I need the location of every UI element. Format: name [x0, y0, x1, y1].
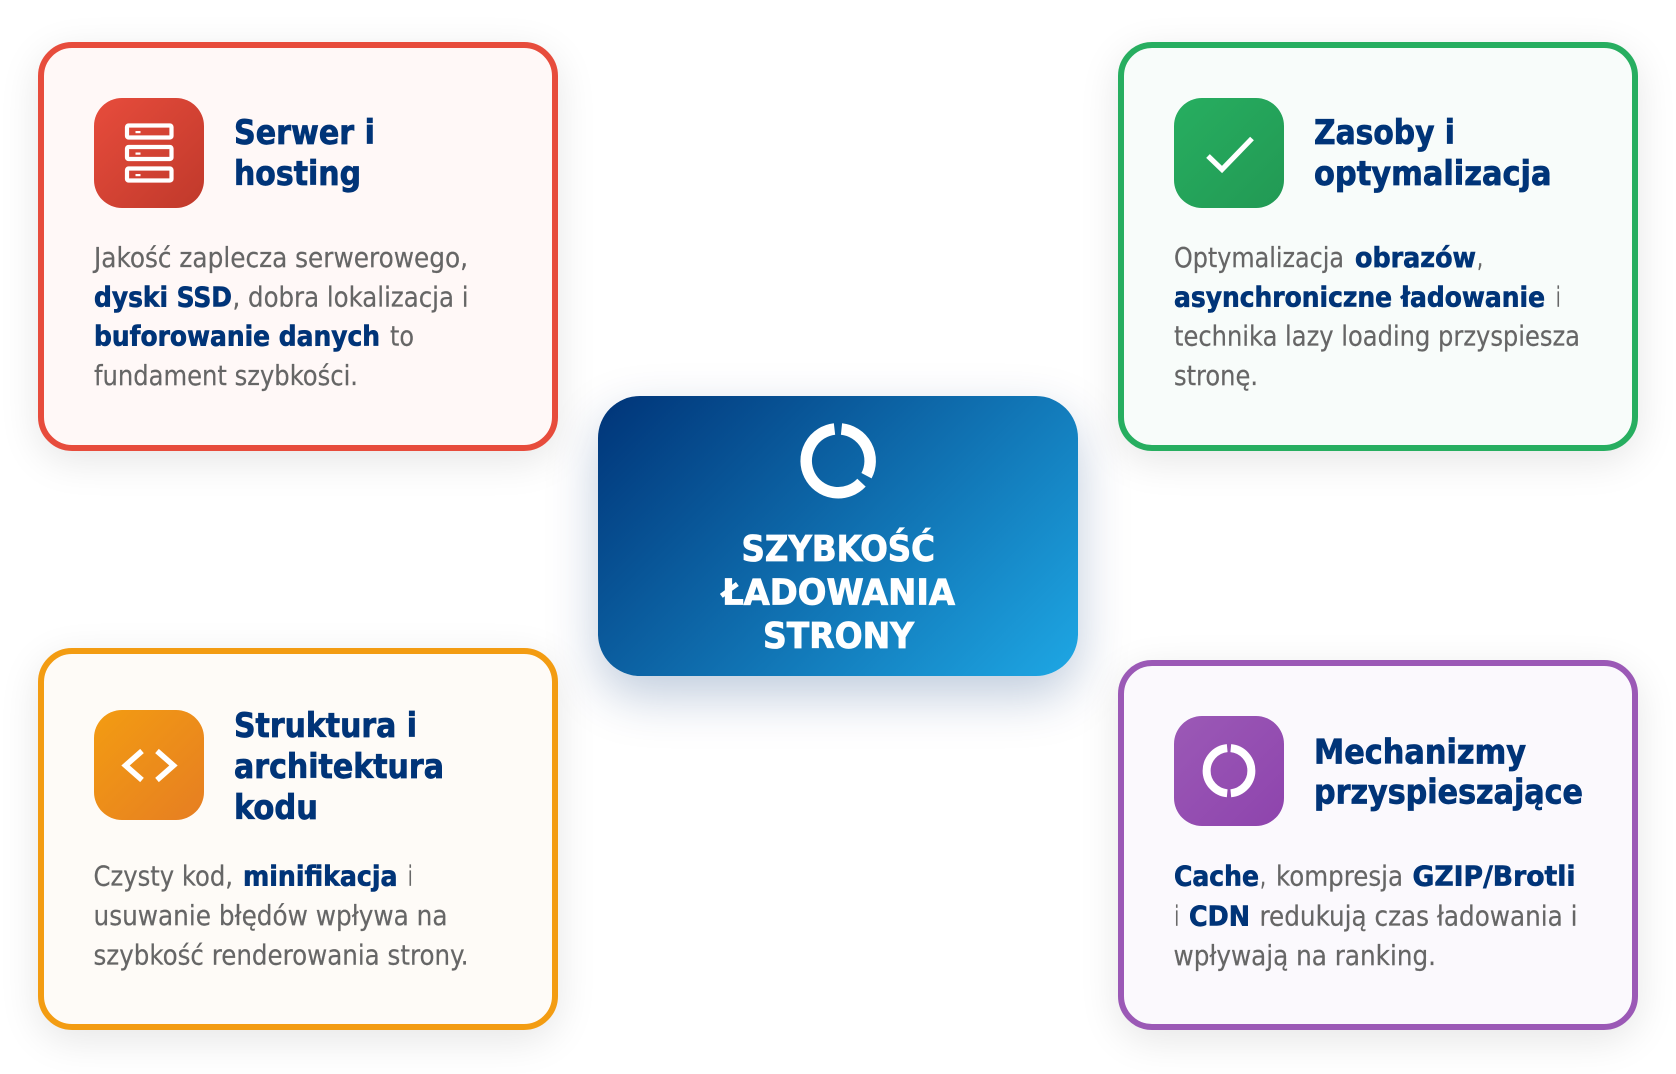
icon: code brackets — [94, 710, 204, 820]
text: code description: minifikacja — [243, 860, 398, 892]
heading: Serwer i hosting — [234, 113, 375, 193]
text: mechanisms description: wpływają na ranking. — [1174, 939, 1436, 972]
title: Szybkość ładowania strony: SZYBKOŚĆ — [742, 528, 935, 570]
text: code description: usuwanie błędów wpływa na — [94, 899, 448, 932]
text: mechanisms description: redukują czas ładowania i — [1260, 900, 1578, 932]
text: resources description: stronę. — [1174, 359, 1258, 392]
text: mechanisms description: Cache — [1174, 860, 1259, 892]
title: Szybkość ładowania strony — [720, 528, 955, 657]
text: resources description: Optymalizacja — [1174, 241, 1344, 274]
heading: Mechanizmy przyspieszające: Mechanizmy — [1314, 732, 1526, 772]
heading: Zasoby i optymalizacja — [1314, 113, 1552, 193]
text: resources description — [1174, 241, 1580, 392]
icon: split ring — [1174, 716, 1284, 826]
text: code description: i — [408, 860, 412, 892]
text: resources description: , — [1477, 241, 1483, 274]
panel: Struktura i architektura kodu — [38, 648, 558, 1030]
heading: Struktura i architektura kodu: Struktura i — [234, 706, 417, 745]
text: resources description: technika lazy loading przyspiesza — [1174, 320, 1580, 352]
icon: loading ring — [806, 429, 870, 493]
text: server description: , dobra lokalizacja i — [232, 280, 468, 314]
text: code description: Czysty kod, — [94, 860, 233, 892]
text: code description: szybkość renderowania strony. — [94, 938, 468, 972]
text: resources description: i — [1556, 280, 1560, 314]
heading: Mechanizmy przyspieszające — [1314, 732, 1583, 812]
text: server description — [92, 241, 469, 392]
panel: Zasoby i optymalizacja — [1118, 42, 1638, 451]
panel: center topic — [598, 396, 1078, 676]
text: server description: buforowanie danych — [94, 320, 380, 352]
text: server description: fundament szybkości. — [94, 359, 358, 392]
text: code description — [94, 860, 468, 972]
text: mechanisms description: , — [1260, 860, 1266, 892]
text: mechanisms description: GZIP/Brotli — [1412, 860, 1576, 892]
panel: Serwer i hosting — [38, 42, 558, 451]
title: Szybkość ładowania strony: ŁADOWANIA — [720, 572, 955, 614]
icon: check mark — [1174, 98, 1284, 208]
heading: Struktura i architektura kodu: kodu — [234, 788, 318, 827]
heading: Zasoby i optymalizacja: optymalizacja — [1314, 154, 1552, 193]
heading: Mechanizmy przyspieszające: przyspieszające — [1314, 772, 1583, 812]
title: Szybkość ładowania strony: STRONY — [763, 616, 915, 657]
heading: Struktura i architektura kodu — [234, 706, 444, 827]
heading: Zasoby i optymalizacja: Zasoby i — [1314, 113, 1455, 152]
panel: Mechanizmy przyspieszające — [1118, 660, 1638, 1030]
text: mechanisms description: kompresja — [1276, 860, 1403, 892]
text: mechanisms description — [1174, 860, 1578, 972]
text: mechanisms description: i — [1174, 900, 1179, 932]
text: server description: dyski SSD — [94, 280, 232, 314]
text: server description: to — [390, 320, 414, 352]
text: mechanisms description: CDN — [1189, 900, 1250, 932]
heading: Serwer i hosting: hosting — [234, 154, 361, 193]
text: resources description: asynchroniczne ładowanie — [1174, 280, 1545, 314]
text: resources description: obrazów — [1355, 241, 1476, 274]
heading: Struktura i architektura kodu: architektura — [234, 747, 444, 786]
heading: Serwer i hosting: Serwer i — [234, 113, 375, 152]
text: server description: Jakość zaplecza serwerowego, — [92, 241, 468, 274]
icon: server — [94, 98, 204, 208]
